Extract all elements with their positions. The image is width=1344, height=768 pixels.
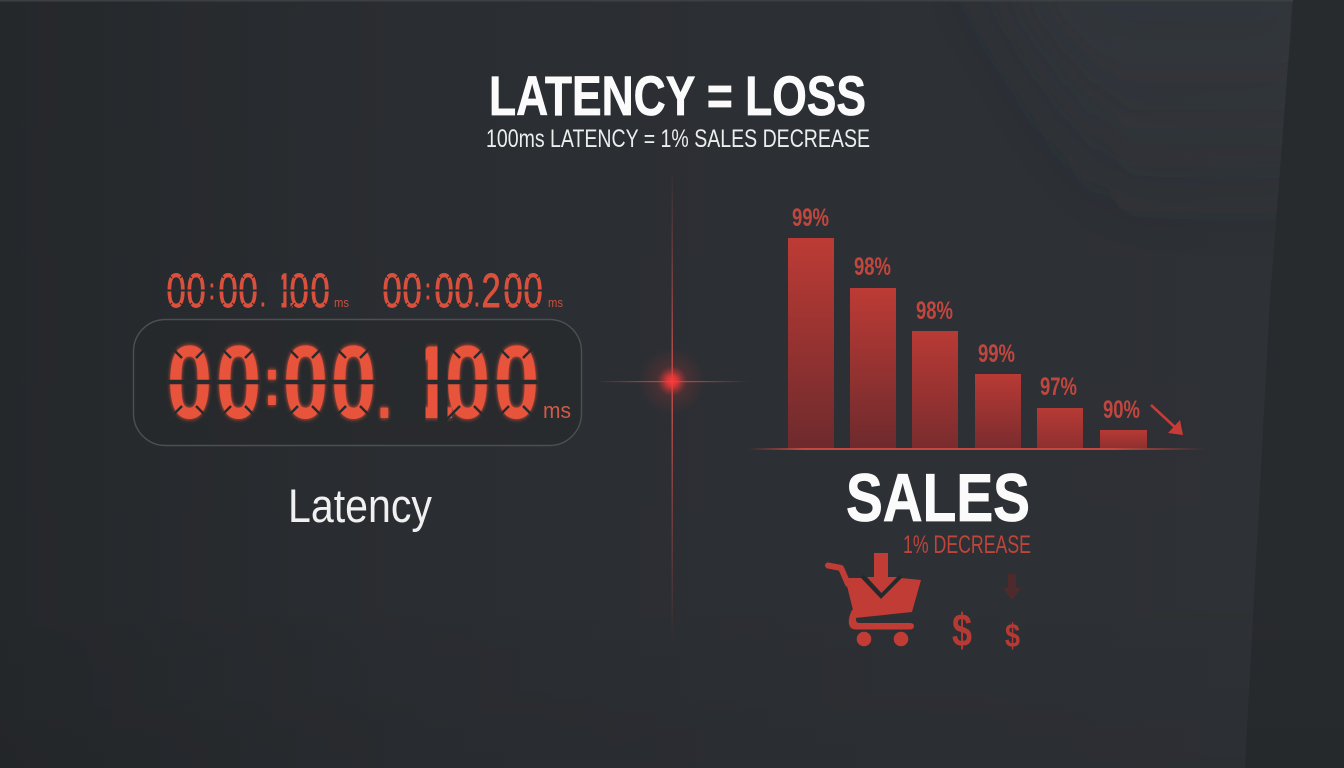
small timer: 100 ms: 100 [275, 263, 330, 317]
title: LATENCY = LOSS [489, 64, 866, 127]
small timer: 200 ms: 00 [383, 263, 422, 317]
latency label: Latency [288, 479, 432, 532]
small timer: 100 ms: . [260, 281, 266, 313]
bars [788, 238, 1147, 448]
bar chart: sales [748, 204, 1206, 450]
small timer: 100 ms [167, 263, 349, 317]
small timer: 200 ms [383, 263, 563, 317]
main timer readout: 100 [409, 324, 539, 440]
bar values [792, 204, 1140, 424]
bar values: 98% [916, 297, 953, 325]
main timer readout [167, 324, 571, 440]
main timer readout: ms [543, 398, 571, 423]
sales decrease label: 1% DECREASE [903, 531, 1031, 559]
main timer readout: 00 [167, 324, 261, 440]
main timer panel [134, 320, 582, 446]
icon: dim down arrow [1003, 574, 1021, 600]
small timer: 200 ms: ms [548, 295, 563, 310]
bar values: 98% [854, 253, 891, 281]
panel: latency timers [134, 263, 582, 446]
bar values: 97% [1040, 373, 1077, 401]
main timer readout: 00 [283, 324, 376, 440]
small timer: 200 ms: . [474, 281, 480, 313]
icon: small dollar sign: $ [1005, 617, 1020, 654]
small timer: 100 ms: : [209, 274, 215, 306]
sales heading: SALES [846, 460, 1030, 536]
main timer readout: : [263, 343, 281, 421]
small timer: 200 ms: 00 [435, 263, 474, 317]
subtitle: 100ms LATENCY = 1% SALES DECREASE [486, 125, 870, 153]
small timer: 100 ms: 00 [167, 263, 206, 317]
crosshair with glowing centre [595, 175, 750, 645]
small timer: 200 ms: : [425, 274, 431, 306]
small timer: 100 ms: 00 [219, 263, 258, 317]
icon: downward trend arrow [1151, 405, 1183, 435]
bar values: 99% [792, 204, 829, 232]
small timer: 200 ms: 200 [482, 263, 543, 317]
bar values: 99% [978, 340, 1015, 368]
icon: large dollar sign: $ [952, 604, 972, 656]
baseline axis [748, 448, 1206, 450]
bar values: 90% [1103, 396, 1140, 424]
icon: shopping cart with down arrow [828, 553, 921, 646]
main timer readout: . [377, 356, 392, 434]
small timer: 100 ms: ms [334, 295, 349, 310]
